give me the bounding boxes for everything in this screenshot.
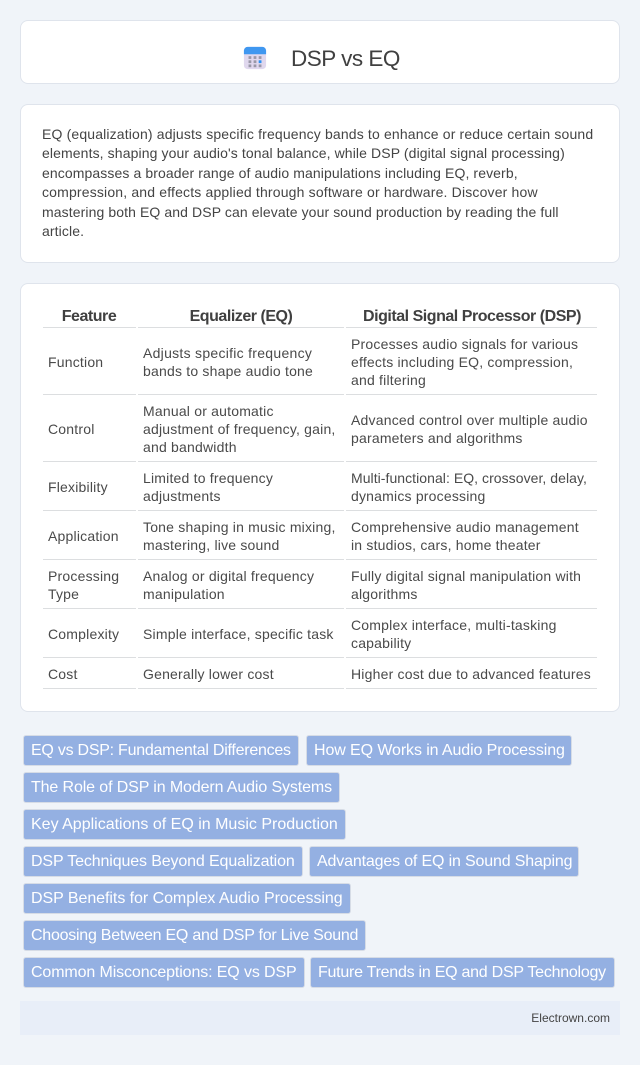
footer credit: Electrown.com — [531, 1011, 610, 1025]
tag: EQ vs DSP: Fundamental Differences — [31, 742, 291, 759]
panel: comparison table — [20, 283, 620, 712]
tag: Future Trends in EQ and DSP Technology — [318, 964, 606, 981]
row: complexity — [48, 617, 557, 651]
intro paragraph: compression, and effects applied through software or hardware. Discover how — [42, 184, 538, 200]
table rules — [43, 327, 597, 689]
table header row: Digital Signal Processor (DSP) — [363, 308, 581, 325]
row: flexibility: Multi-functional: EQ, crossover, delay, — [351, 470, 587, 486]
tag — [23, 846, 303, 877]
row: control: Manual or automatic — [143, 403, 274, 419]
icon: calendar grid — [244, 46, 266, 70]
row: function — [48, 336, 578, 388]
tag — [309, 846, 579, 877]
row: complexity: Complex interface, multi-tasking — [351, 617, 557, 633]
row: complexity: Complexity — [48, 626, 119, 642]
row: processing type: Analog or digital frequency — [143, 568, 314, 584]
row: processing type: Processing — [48, 568, 119, 584]
footer bar — [20, 1001, 620, 1035]
title: DSP vs EQ — [291, 46, 400, 71]
tag — [23, 957, 305, 988]
row: application: mastering, live sound — [143, 537, 280, 553]
row: flexibility: adjustments — [143, 488, 221, 504]
table header row — [62, 308, 581, 325]
topic tags — [23, 735, 615, 988]
tag: Common Misconceptions: EQ vs DSP — [31, 964, 297, 981]
row: flexibility — [48, 470, 587, 504]
tag — [23, 772, 340, 803]
row: cost: Generally lower cost — [143, 666, 274, 682]
row: control — [48, 403, 588, 455]
tag — [23, 883, 351, 914]
tag — [306, 735, 572, 766]
row: control: Advanced control over multiple audio — [351, 412, 588, 428]
row: processing type: manipulation — [143, 586, 225, 602]
intro paragraph: mastering both EQ and DSP can elevate your sound production by reading the full — [42, 204, 559, 220]
header panel — [20, 20, 620, 84]
row: processing type — [48, 568, 581, 602]
row: control: and bandwidth — [143, 439, 237, 455]
row: function: effects including EQ, compression, — [351, 354, 573, 370]
row: function: Function — [48, 354, 103, 370]
row: processing type: Type — [48, 586, 79, 602]
row: application: Comprehensive audio management — [351, 519, 579, 535]
tag — [310, 957, 615, 988]
row: complexity: capability — [351, 635, 411, 651]
row: function: Adjusts specific frequency — [143, 345, 312, 361]
intro paragraph — [42, 126, 593, 239]
table header row: Feature — [62, 308, 116, 325]
row: cost: Cost — [48, 666, 78, 682]
tag: DSP Benefits for Complex Audio Processing — [31, 890, 343, 907]
row: complexity: Simple interface, specific task — [143, 626, 334, 642]
row: application: Application — [48, 528, 119, 544]
row: processing type: algorithms — [351, 586, 418, 602]
row: flexibility: dynamics processing — [351, 488, 486, 504]
row: application: in studios, cars, home theater — [351, 537, 541, 553]
intro paragraph: elements, shaping your audio's tonal balance, while DSP (digital signal processing) — [42, 145, 565, 161]
row: cost: Higher cost due to advanced features — [351, 666, 591, 682]
tag — [23, 920, 366, 951]
tag: The Role of DSP in Modern Audio Systems — [31, 779, 332, 796]
intro paragraph: article. — [42, 223, 84, 239]
row: function: Processes audio signals for various — [351, 336, 578, 352]
tag: DSP Techniques Beyond Equalization — [31, 853, 295, 870]
tag — [23, 809, 346, 840]
row: flexibility: Limited to frequency — [143, 470, 273, 486]
panel: intro text — [20, 104, 620, 263]
table header row: Equalizer (EQ) — [190, 308, 292, 325]
tag: How EQ Works in Audio Processing — [314, 742, 565, 759]
row: control: Control — [48, 421, 95, 437]
intro paragraph: EQ (equalization) adjusts specific frequency bands to enhance or reduce certain sound — [42, 126, 593, 142]
row: flexibility: Flexibility — [48, 479, 108, 495]
row: control: parameters and algorithms — [351, 430, 523, 446]
tag: Choosing Between EQ and DSP for Live Sound — [31, 927, 358, 944]
tag — [23, 735, 299, 766]
tag: Advantages of EQ in Sound Shaping — [317, 853, 572, 870]
row: application — [48, 519, 579, 553]
row: cost — [48, 666, 591, 682]
row: function: and filtering — [351, 372, 426, 388]
row: control: adjustment of frequency, gain, — [143, 421, 336, 437]
row: function: bands to shape audio tone — [143, 363, 313, 379]
row: application: Tone shaping in music mixing, — [143, 519, 336, 535]
intro paragraph: encompasses a broader range of audio manipulations including EQ, reverb, — [42, 165, 518, 181]
tag: Key Applications of EQ in Music Production — [31, 816, 338, 833]
row: processing type: Fully digital signal manipulation with — [351, 568, 581, 584]
